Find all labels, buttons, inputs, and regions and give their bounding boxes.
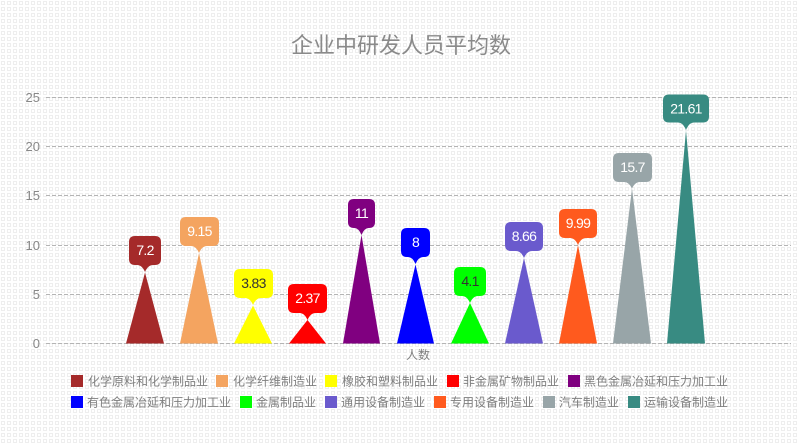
legend item row 2: 运输设备制造业 bbox=[644, 394, 728, 410]
y axis labels bbox=[26, 90, 40, 351]
bar: 运输设备制造业: 21.61 bbox=[670, 100, 703, 116]
bar: 黑色金属冶延和压力加工业: 11 bbox=[355, 205, 369, 221]
bar: 金属制品业: 4.1 bbox=[461, 273, 480, 289]
bar: 汽车制造业 bbox=[613, 153, 652, 344]
bar: 非金属矿物制品业 bbox=[288, 284, 327, 344]
legend item row 2: 有色金属冶延和压力加工业 bbox=[87, 394, 231, 410]
bar: 专用设备制造业: 9.99 bbox=[566, 215, 591, 231]
legend item row 1: 非金属矿物制品业 bbox=[463, 374, 559, 388]
bar: 橡胶和塑料制品业 bbox=[234, 269, 273, 344]
legend item row 1 bbox=[71, 374, 728, 388]
y axis labels: 15 bbox=[26, 188, 40, 203]
legend item row 2: 通用设备制造业 bbox=[341, 396, 425, 410]
y axis labels: 0 bbox=[33, 336, 40, 351]
bar: 化学原料和化学制品业 bbox=[126, 236, 164, 344]
legend item row 1: 化学纤维制造业 bbox=[233, 374, 317, 388]
y axis labels: 25 bbox=[26, 90, 40, 105]
bar: 金属制品业 bbox=[451, 267, 489, 344]
bar: 运输设备制造业 bbox=[663, 94, 709, 344]
y axis labels: 20 bbox=[26, 139, 40, 154]
bar: 通用设备制造业: 8.66 bbox=[512, 228, 537, 244]
legend item row 1: 橡胶和塑料制品业 bbox=[342, 374, 438, 388]
legend item row 2: 汽车制造业 bbox=[559, 394, 619, 410]
bar: 化学纤维制造业: 9.15 bbox=[187, 223, 213, 239]
y axis labels: 5 bbox=[33, 287, 40, 302]
legend item row 2 bbox=[71, 394, 728, 410]
bar: 通用设备制造业 bbox=[505, 222, 543, 344]
bar: 专用设备制造业 bbox=[559, 209, 597, 344]
bar: 有色金属冶延和压力加工业 bbox=[397, 228, 434, 344]
x axis name: 人数 bbox=[406, 347, 430, 362]
legend bbox=[71, 374, 728, 410]
legend item row 2: 金属制品业 bbox=[256, 394, 316, 410]
bar: 黑色金属冶延和压力加工业 bbox=[343, 199, 380, 344]
legend item row 2: 专用设备制造业 bbox=[450, 394, 534, 410]
bar: 化学原料和化学制品业: 7.2 bbox=[136, 242, 155, 258]
bar: 化学纤维制造业 bbox=[180, 217, 219, 344]
y axis labels: 10 bbox=[26, 238, 40, 253]
bar: 非金属矿物制品业: 2.37 bbox=[295, 290, 321, 306]
legend item row 1: 黑色金属冶延和压力加工业 bbox=[584, 374, 728, 388]
title: 企业中研发人员平均数 bbox=[291, 33, 511, 58]
bar: 汽车制造业: 15.7 bbox=[620, 159, 646, 175]
bar: 有色金属冶延和压力加工业: 8 bbox=[412, 234, 420, 250]
gridlines bbox=[46, 98, 791, 344]
legend item row 1: 化学原料和化学制品业 bbox=[88, 374, 208, 388]
bar: 橡胶和塑料制品业: 3.83 bbox=[241, 275, 267, 291]
